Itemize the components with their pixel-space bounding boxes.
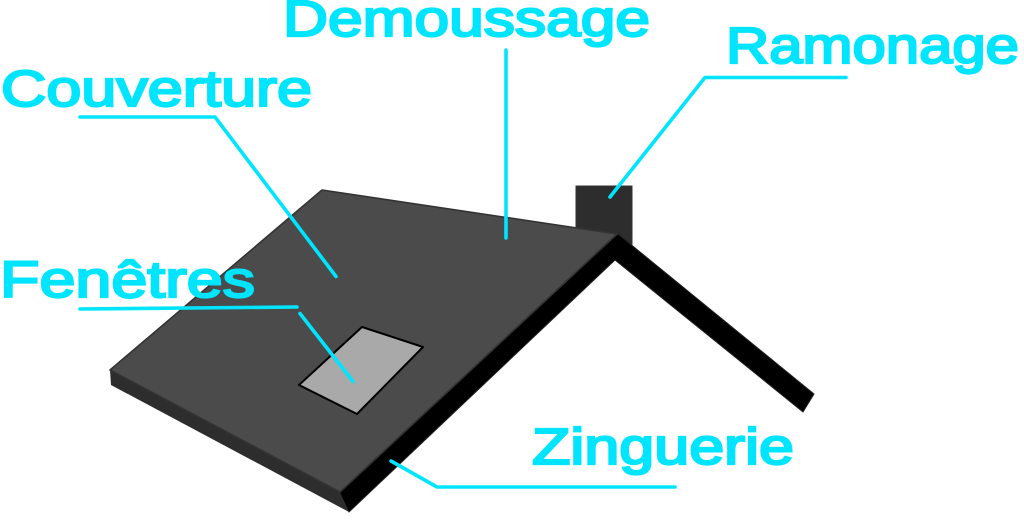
leader line: Ramonage [610, 78, 846, 197]
label: Fenêtres: Fenêtres [0, 251, 255, 308]
roof edge thickness [110, 370, 349, 512]
label: Couverture [1, 60, 336, 276]
roof surface [110, 190, 617, 492]
leader line: Fenêtres [80, 307, 297, 309]
illustration: house roof [110, 186, 814, 512]
label: Ramonage: Ramonage [726, 17, 1019, 74]
label: Fenêtres [0, 251, 353, 382]
label: Zinguerie [391, 418, 794, 487]
skylight window [299, 327, 423, 414]
label: Ramonage [610, 17, 1019, 197]
leader line: Zinguerie [391, 461, 675, 487]
roof fascia: black zinc edge [330, 234, 814, 512]
leader line: Demoussage [504, 50, 508, 238]
label: Zinguerie: Zinguerie [532, 418, 794, 475]
chimney [576, 186, 632, 246]
label: Couverture: Couverture [1, 60, 312, 117]
leader line: Couverture [80, 117, 336, 276]
